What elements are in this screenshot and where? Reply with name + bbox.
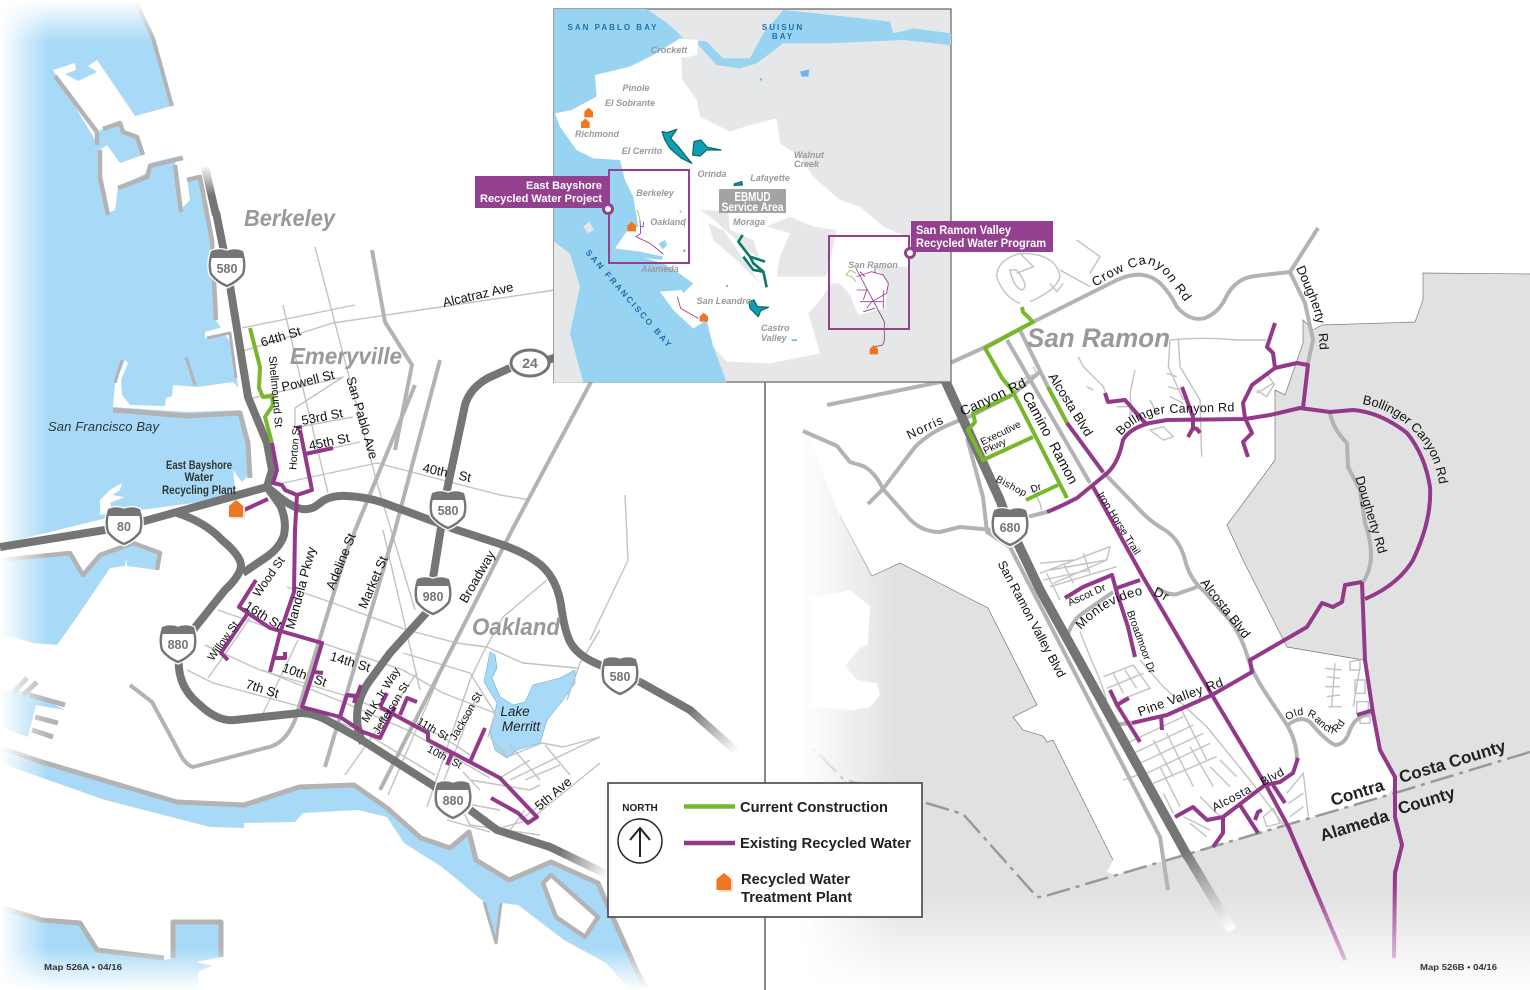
panel: legend <box>608 783 922 917</box>
inset city labels: Berkeley <box>636 188 675 198</box>
callout box: East Bayshore area <box>475 170 689 263</box>
city names: Oakland <box>472 614 561 641</box>
street names: Montevideo Dr <box>1075 587 1169 630</box>
callout box: San Ramon Valley area <box>829 221 1053 329</box>
shield: I-880 west <box>161 626 195 662</box>
green pipeline: current construction <box>250 328 273 443</box>
shield: I-680 <box>993 510 1027 545</box>
land: small jetty <box>205 325 235 338</box>
county labels <box>1318 736 1509 845</box>
land: Treatment plant shore <box>233 470 262 498</box>
inset city labels: Alameda <box>640 264 679 274</box>
shield: I-880 west: 880 <box>168 638 188 652</box>
service area boundary line <box>840 273 1530 860</box>
panel: East Bayshore map base water <box>0 0 660 990</box>
inset city labels: Pinole <box>622 83 650 93</box>
street names: Camino Ramon <box>1019 389 1081 487</box>
reservoir: Upper San Leandro <box>738 235 767 287</box>
street names: Alcatraz Ave <box>441 279 515 310</box>
shield: I-880 south: 880 <box>443 794 463 808</box>
shield: I-580 north: 580 <box>217 262 237 276</box>
inset city labels: El Cerrito <box>622 146 663 156</box>
legend item: existing recycled water: Existing Recycled Water <box>740 835 911 852</box>
street names: Horton St <box>287 425 303 470</box>
north arrow <box>618 803 662 863</box>
inset geography <box>554 9 951 382</box>
street names: Alcosta Blvd <box>1198 575 1253 641</box>
inset city labels: San Leandro <box>697 296 752 306</box>
major roads <box>130 250 592 790</box>
inset city labels: Moraga <box>733 217 765 227</box>
city names: Emeryville <box>290 343 402 369</box>
shield: I-580 east <box>603 658 637 694</box>
water: west piers basin <box>0 690 65 737</box>
inset city labels <box>575 45 898 343</box>
labels: left map <box>44 205 574 972</box>
inset city labels: Lafayette <box>750 173 790 183</box>
street names: Broadmoor Dr <box>1124 609 1158 675</box>
land: Emeryville peninsula <box>113 360 245 412</box>
shield: I-580 center <box>431 492 465 528</box>
county labels: Costa County <box>1397 736 1509 787</box>
gray land outside service area <box>803 273 1530 990</box>
white blob <box>810 590 880 710</box>
street names: Bollinger Canyon Rd <box>1116 402 1234 436</box>
land: bay islands <box>583 222 594 233</box>
street names: Wood St <box>250 553 288 599</box>
street names: Broadway <box>456 548 498 606</box>
water: Lake Merritt and estuary <box>615 240 693 293</box>
street names <box>866 254 1448 814</box>
map number left: Map 526A • 04/16 <box>44 962 122 972</box>
street names: Iron Horse Trail <box>1094 490 1143 557</box>
street names: Mandela Pkwy <box>282 545 319 631</box>
street names: Powell St <box>280 367 336 394</box>
street names: 45th St <box>307 430 351 453</box>
street names: Bollinger Canyon Rd <box>1363 395 1448 484</box>
legend item: treatment plant: Treatment Plant <box>741 889 852 906</box>
inset city labels: Crockett <box>651 45 688 55</box>
legend item: current construction: Current Construction <box>740 799 888 816</box>
street names: 64th St <box>259 323 303 350</box>
street names: Shellmound St <box>266 356 284 428</box>
street names: 7th St <box>244 676 281 701</box>
inset city labels: Orinda <box>697 169 727 179</box>
water and plant labels: Water <box>184 470 214 484</box>
county labels: Alameda <box>1318 806 1392 845</box>
street names: Market St <box>355 553 391 611</box>
label: EBMUD Service Area: EBMUD <box>734 189 770 204</box>
callout box: San Ramon Valley area: Recycled Water Program <box>916 238 1046 250</box>
land: white service area <box>555 38 908 363</box>
inset city labels: Valley <box>761 333 788 343</box>
street names: Dr <box>1029 481 1044 496</box>
water: bay system <box>554 9 951 382</box>
inset city labels: Richmond <box>575 129 620 139</box>
street names: San Ramon Valley Blvd <box>995 558 1068 680</box>
shield: I-680: 680 <box>1000 521 1020 535</box>
label: EBMUD Service Area: Service Area <box>722 200 784 214</box>
panel: inset locator map <box>475 9 1053 382</box>
inset city labels: El Sobrante <box>605 98 655 108</box>
map number right: Map 526B • 04/16 <box>1420 962 1497 972</box>
city name: San Ramon <box>1027 323 1170 353</box>
legend item: treatment plant: Recycled Water <box>741 871 850 888</box>
inset city labels: Creek <box>794 159 820 169</box>
inset water labels: SAN FRANCISCO BAY <box>584 248 675 351</box>
shield: I-80 <box>107 508 141 544</box>
city names <box>244 205 561 641</box>
north arrow: NORTH <box>622 803 658 814</box>
major roads <box>803 228 1372 890</box>
fades <box>802 420 1530 990</box>
street names: 14th St <box>328 649 373 675</box>
shield: I-580 east: 580 <box>610 670 630 684</box>
street names: Jackson St <box>448 690 485 743</box>
shoreline: gray edges <box>0 0 644 987</box>
street names: MLK Jr Way <box>360 666 403 725</box>
purple pipelines: existing recycled water <box>221 427 537 823</box>
water and plant labels: East Bayshore <box>166 458 232 472</box>
street names: 40th St <box>421 460 473 485</box>
callout box: San Ramon Valley area: San Ramon Valley <box>916 225 1012 237</box>
land: Richmond and Berkeley piers <box>53 60 210 213</box>
street names: Alcosta Blvd <box>1210 765 1287 814</box>
street names: 10th St <box>425 743 464 771</box>
panel: left map roads <box>0 167 737 875</box>
street names: San Pablo Ave <box>343 375 381 461</box>
county line <box>803 738 1530 897</box>
street names: Willow St <box>206 619 241 663</box>
street names: 5th Ave <box>532 774 574 813</box>
water and plant labels <box>48 419 541 734</box>
divider between panels <box>764 380 766 990</box>
shield: I-580 north <box>210 250 244 286</box>
street names: Executive <box>979 419 1023 448</box>
city names: Berkeley <box>244 205 336 231</box>
street names <box>206 279 574 813</box>
reservoirs: teal <box>662 129 768 317</box>
street names: Ascot Dr <box>1066 581 1108 609</box>
street names: 16th St <box>242 598 285 633</box>
street names: Pkwy <box>982 437 1008 457</box>
street names: Bishop <box>994 474 1029 500</box>
county labels: Contra <box>1328 775 1387 810</box>
street names: Pine Valley Rd <box>1136 674 1225 719</box>
callout box: East Bayshore area: East Bayshore <box>526 180 602 192</box>
neighborhood streets <box>997 240 1275 600</box>
shield: State Route 24 <box>511 350 549 376</box>
highway I-680 <box>945 380 1232 930</box>
street names: Canyon Rd <box>958 375 1029 419</box>
inset city labels: Oakland <box>650 217 686 227</box>
label: EBMUD Service Area <box>719 189 786 214</box>
street names: Jefferson St <box>371 680 412 736</box>
water and plant labels: Recycling Plant <box>162 483 236 497</box>
gray ridges <box>700 210 837 283</box>
panel: right map roads <box>803 228 1430 960</box>
water: Lake Merritt <box>484 652 575 758</box>
county labels: County <box>1396 783 1458 818</box>
land: Port of Oakland jetty <box>100 483 140 515</box>
inset pipelines <box>636 220 888 347</box>
callout box: East Bayshore area: Recycled Water Project <box>480 193 602 205</box>
street names: 10th St <box>280 660 329 690</box>
water: San Francisco Bay <box>0 0 250 547</box>
water: small reservoirs <box>679 69 809 341</box>
land: San Francisco peninsula <box>554 242 583 382</box>
water and plant labels: Merritt <box>502 719 541 734</box>
inset city labels: San Ramon <box>848 260 898 270</box>
fades: map edges <box>0 0 660 990</box>
green pipelines: current construction <box>968 307 1067 500</box>
street names: Crow Canyon Rd <box>1092 258 1192 302</box>
highways <box>0 167 737 875</box>
street names: Alcosta Blvd <box>1045 370 1096 439</box>
street names: Dougherty Rd <box>1296 265 1330 350</box>
inset city labels: Castro <box>761 323 790 333</box>
local streets <box>187 247 628 835</box>
purple pipelines: existing recycled water <box>1047 323 1430 960</box>
inset water labels: SUISUN <box>762 23 804 32</box>
inset city labels: Walnut <box>794 150 825 160</box>
land: Alameda island <box>543 875 598 937</box>
shield: I-80: 80 <box>117 520 131 534</box>
street names: Old Ranch Rd <box>1286 707 1345 734</box>
inset background <box>554 9 951 382</box>
inset water labels <box>568 23 804 351</box>
icon: treatment plant Emeryville <box>229 500 245 519</box>
labels: right map <box>866 254 1509 972</box>
legend item: treatment plant <box>716 871 852 906</box>
inset water labels: SAN PABLO BAY <box>568 23 658 32</box>
panel: San Ramon map base <box>802 273 1530 990</box>
street names: Adeline St <box>323 531 359 592</box>
shield: State Route 24: 24 <box>522 355 538 371</box>
street names: 53rd St <box>300 405 345 428</box>
street names: Dougherty Rd <box>1352 474 1390 555</box>
shield: I-580 center: 580 <box>438 504 458 518</box>
street names: 11th St <box>415 716 450 743</box>
plants <box>581 108 878 354</box>
water: Alameda south basin <box>0 910 221 990</box>
shield: I-980: 980 <box>423 590 443 604</box>
water: below I-80 <box>0 543 160 645</box>
street names: Norris <box>905 413 946 442</box>
shield: I-980 <box>416 578 450 614</box>
shield: I-880 south <box>436 782 470 818</box>
inset water labels: BAY <box>772 32 794 41</box>
water and plant labels: San Francisco Bay <box>48 419 160 434</box>
water: Oakland estuary <box>0 752 650 990</box>
water and plant labels: Lake <box>500 704 530 719</box>
